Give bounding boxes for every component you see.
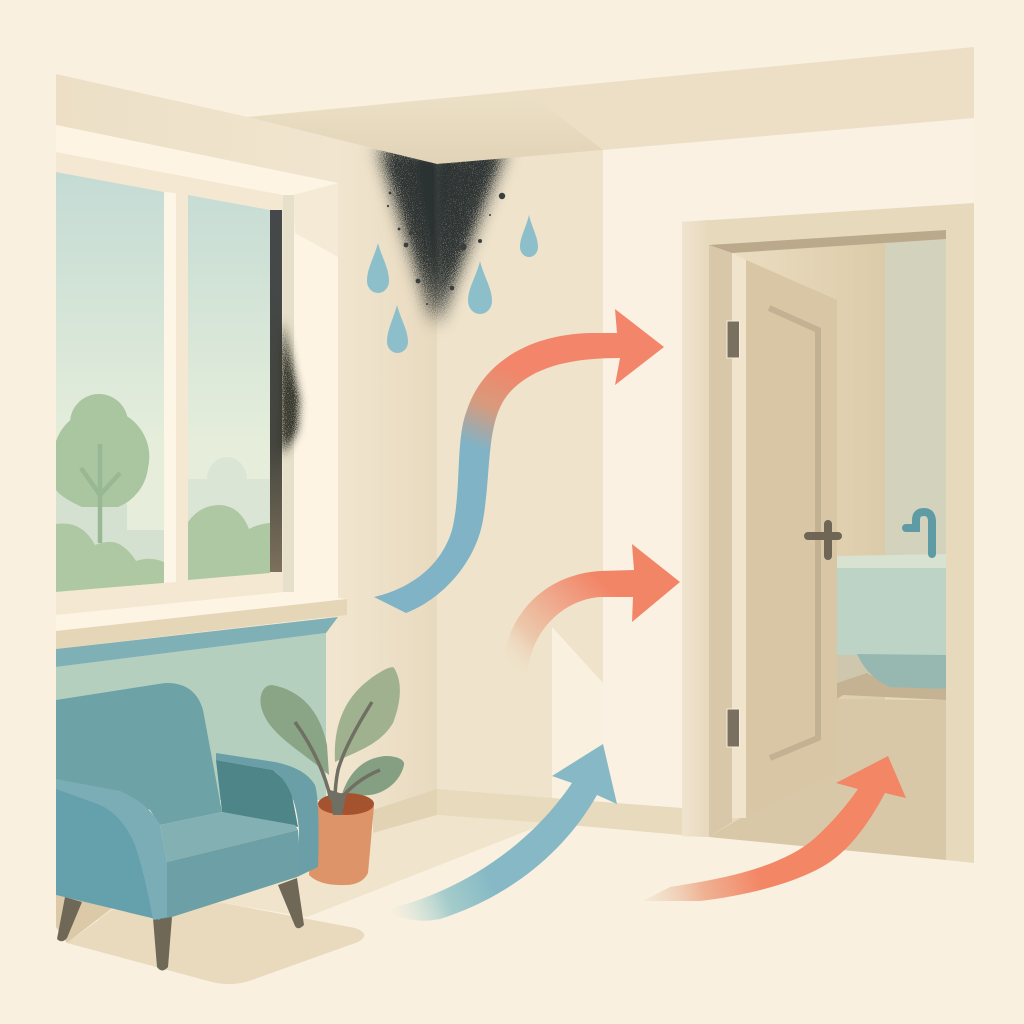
top leaf <box>335 667 400 762</box>
seat front <box>153 830 299 920</box>
window reveal <box>56 125 338 615</box>
arrow: warm air into doorway <box>643 756 906 901</box>
arrow: warm air middle <box>503 544 680 672</box>
arrow: cool air along floor <box>383 744 617 921</box>
mould spots <box>387 192 505 305</box>
chair back <box>56 683 222 825</box>
right wall <box>603 118 974 860</box>
pot <box>309 793 374 885</box>
plant <box>260 667 404 885</box>
left pane <box>56 172 164 592</box>
left wall <box>326 140 437 830</box>
ceiling beam <box>248 47 974 164</box>
ceiling shadow <box>248 92 603 164</box>
radiator panel <box>56 617 338 800</box>
window mould <box>282 320 298 455</box>
jamb strip <box>732 253 746 818</box>
stems <box>295 702 380 815</box>
water drops <box>367 215 538 353</box>
mullion <box>164 192 176 583</box>
tap <box>906 512 932 554</box>
inner right arm <box>216 760 298 827</box>
arrow: moist air rising to door <box>374 309 664 613</box>
chair <box>56 683 319 970</box>
chair legs <box>57 878 304 970</box>
corner mould <box>380 145 505 325</box>
bathroom beyond door <box>709 237 946 860</box>
floor band <box>837 673 946 700</box>
door frame <box>682 203 974 863</box>
window sill <box>56 573 347 649</box>
door jamb <box>709 245 732 837</box>
window panes and view <box>56 172 282 592</box>
left leaf <box>260 685 329 775</box>
tree <box>56 394 149 543</box>
floor <box>709 699 946 860</box>
corner wall section <box>437 150 603 800</box>
left bushes <box>56 523 164 592</box>
low leaf <box>342 756 404 795</box>
seat top <box>160 812 298 862</box>
distant buildings <box>56 457 270 565</box>
door handle <box>808 524 838 556</box>
bathtub <box>837 554 946 689</box>
door leaf <box>746 260 838 817</box>
door head <box>709 230 946 253</box>
right pane <box>188 195 270 580</box>
chair shadow <box>56 895 364 984</box>
floor patch <box>56 815 547 925</box>
right bushes <box>188 505 270 580</box>
left arm body <box>56 783 160 920</box>
dark window edge <box>270 210 282 572</box>
right arm <box>216 753 319 877</box>
left arm highlight <box>56 779 167 920</box>
hinges <box>727 321 740 747</box>
left ceiling band <box>56 74 437 205</box>
skirting board <box>373 789 682 835</box>
